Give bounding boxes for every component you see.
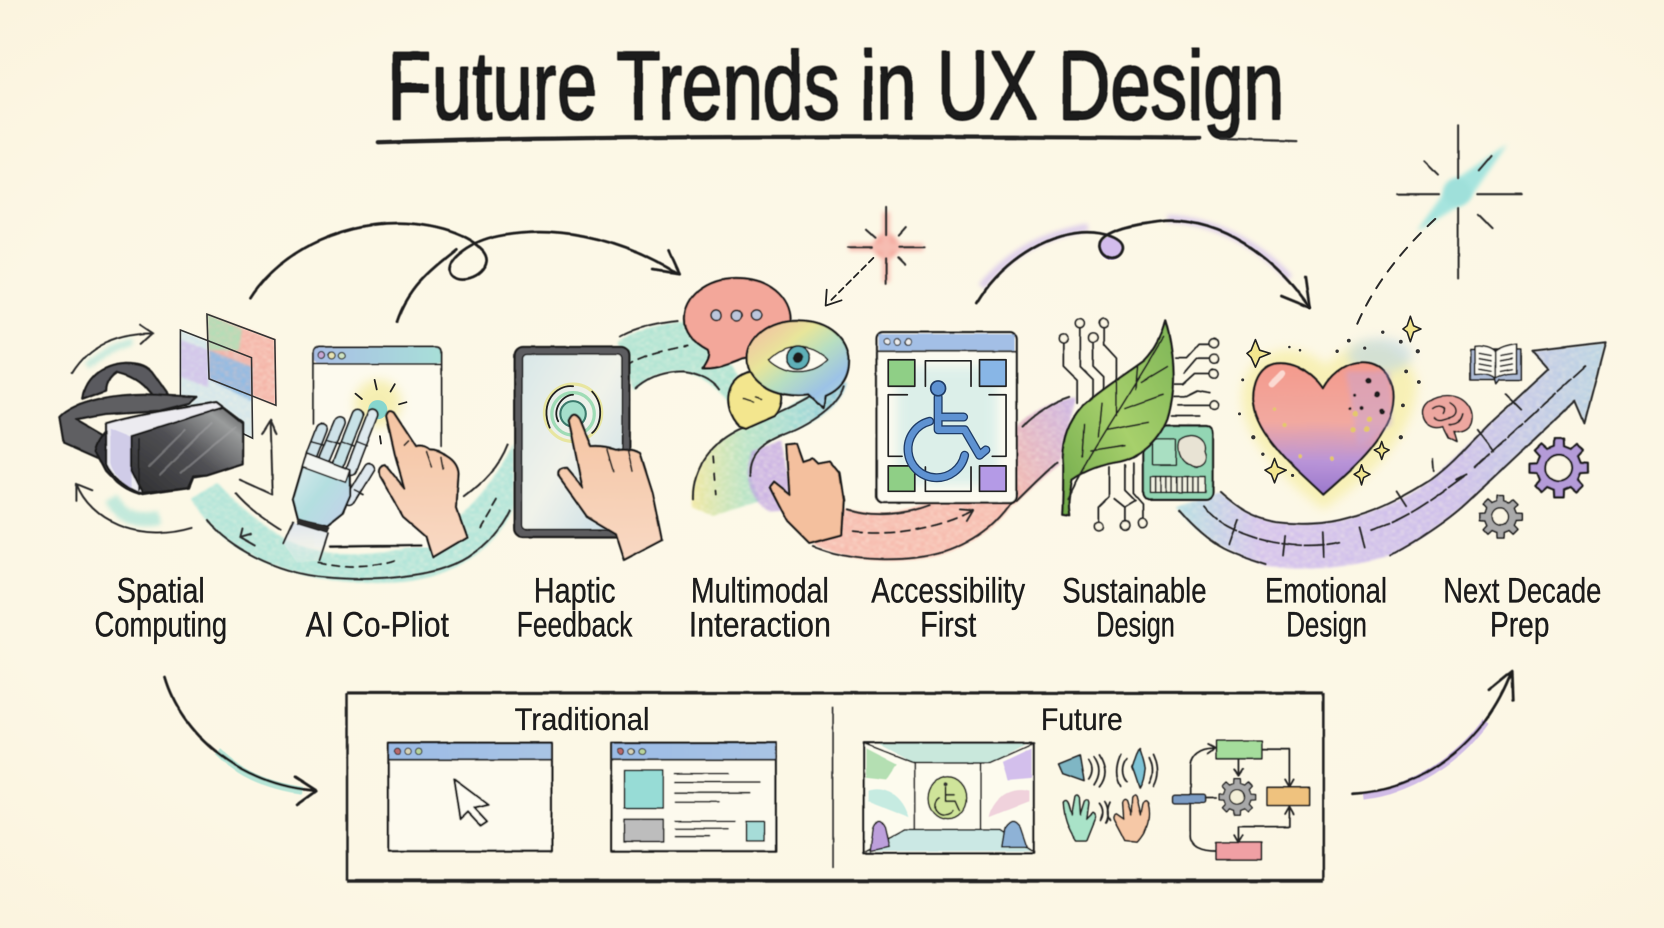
label: Sustainable Design: Sustainable [1062,572,1207,611]
step 7: Emotional Design icon [1238,316,1421,509]
particles around heart [1238,330,1421,477]
arrow out of comparison panel [1353,671,1513,796]
arrow centre line with ticks [1203,366,1585,557]
label: Emotional Design: Design [1286,606,1367,645]
icon: browser window frame [877,332,1017,503]
label: Accessibility First [871,572,1026,645]
icon: tablet [515,347,629,537]
icon: spatial room [864,743,1034,853]
label: Sustainable Design: Design [1096,606,1175,645]
step 2: AI Co-Pilot icon [283,347,467,562]
step labels [94,572,1601,645]
icon: hand [769,444,844,543]
sparkles [1247,316,1421,485]
label: Spatial Computing [94,572,227,645]
label: Emotional Design [1265,572,1387,645]
arrows orbiting headset [72,325,277,545]
label: Sustainable Design [1062,572,1207,645]
label: Next Decade Prep: Next Decade [1443,572,1601,611]
icon: adaptive flow diagram [1173,741,1310,860]
label: Haptic Feedback: Haptic [534,572,616,611]
label: Multimodal Interaction: Multimodal [691,572,829,611]
big arrow from spatial to multimodal [250,223,679,322]
icon: human hand [379,411,467,557]
label: AI Co-Pliot: AI Co-Pliot [306,606,449,645]
label: Next Decade Prep [1443,572,1601,645]
label: Emotional Design: Emotional [1265,572,1387,611]
label: Multimodal Interaction [689,572,831,645]
icon: leaf [1062,320,1173,516]
icon: wheelchair [908,381,986,478]
step 5: Accessibility First icon [877,332,1017,503]
icon: pink speech bubble [684,278,791,368]
icon: voice and gesture [1059,748,1158,842]
icon: chip [1143,426,1213,500]
icon: particle cloud [1348,339,1411,372]
label: Next Decade Prep: Prep [1490,606,1549,645]
heading: Future: Future [1041,701,1123,737]
panel: Traditional vs Future comparison [347,693,1323,881]
icon: heart glow [1242,344,1417,509]
label: Multimodal Interaction: Interaction [689,606,831,645]
icon: browser window [313,347,441,548]
step 4: Multimodal Interaction icon [684,207,924,543]
arrow from accessibility to emotional [976,219,1310,308]
icon: pointing hand [558,414,662,560]
window: cursor [388,743,552,851]
step 3: Haptic Feedback icon [515,347,662,560]
icon: touch spark [354,380,406,444]
icon: glow [897,366,998,485]
icon: eye speech bubble [747,320,849,409]
icon: VR headset [59,363,243,495]
icon: large gear [1530,439,1588,497]
icon: touch ripples [544,384,602,441]
title: Future Trends in UX Design [387,31,1284,140]
icon: heart [1253,362,1393,495]
flowing colour ribbons [191,322,1606,583]
label: Accessibility First: First [920,606,977,645]
label: Haptic Feedback: Feedback [517,606,633,645]
icon: circuit traces [1059,319,1218,531]
step 8: Next Decade Prep icons [1423,344,1588,538]
icon: pink star with dashed arrow [826,207,924,306]
icon: small gear [1479,496,1522,538]
icon: floating panels [180,314,276,438]
step 1: Spatial Computing icon [59,314,277,545]
icon: open book [1471,344,1521,384]
label: Spatial Computing: Spatial [117,572,205,611]
step 6: Sustainable Design icon [1059,319,1218,531]
label: Spatial Computing: Computing [94,606,227,645]
icon: brain [1423,396,1471,441]
ribbon outlines [207,320,1606,579]
ribbon: emotional to next decade arrow [1176,343,1606,569]
window: content layout [611,743,776,851]
icon: interface tiles [888,360,1006,491]
label: Accessibility First: Accessibility [871,572,1026,611]
heading: Traditional: Traditional [515,701,649,737]
arrow into comparison panel [164,677,316,804]
panel frame [347,693,1323,881]
icon: yellow speech bubble [728,371,782,429]
label: Haptic Feedback [517,572,633,645]
icon: robot hand [283,415,372,562]
teal star with dashed trail [1357,125,1522,324]
